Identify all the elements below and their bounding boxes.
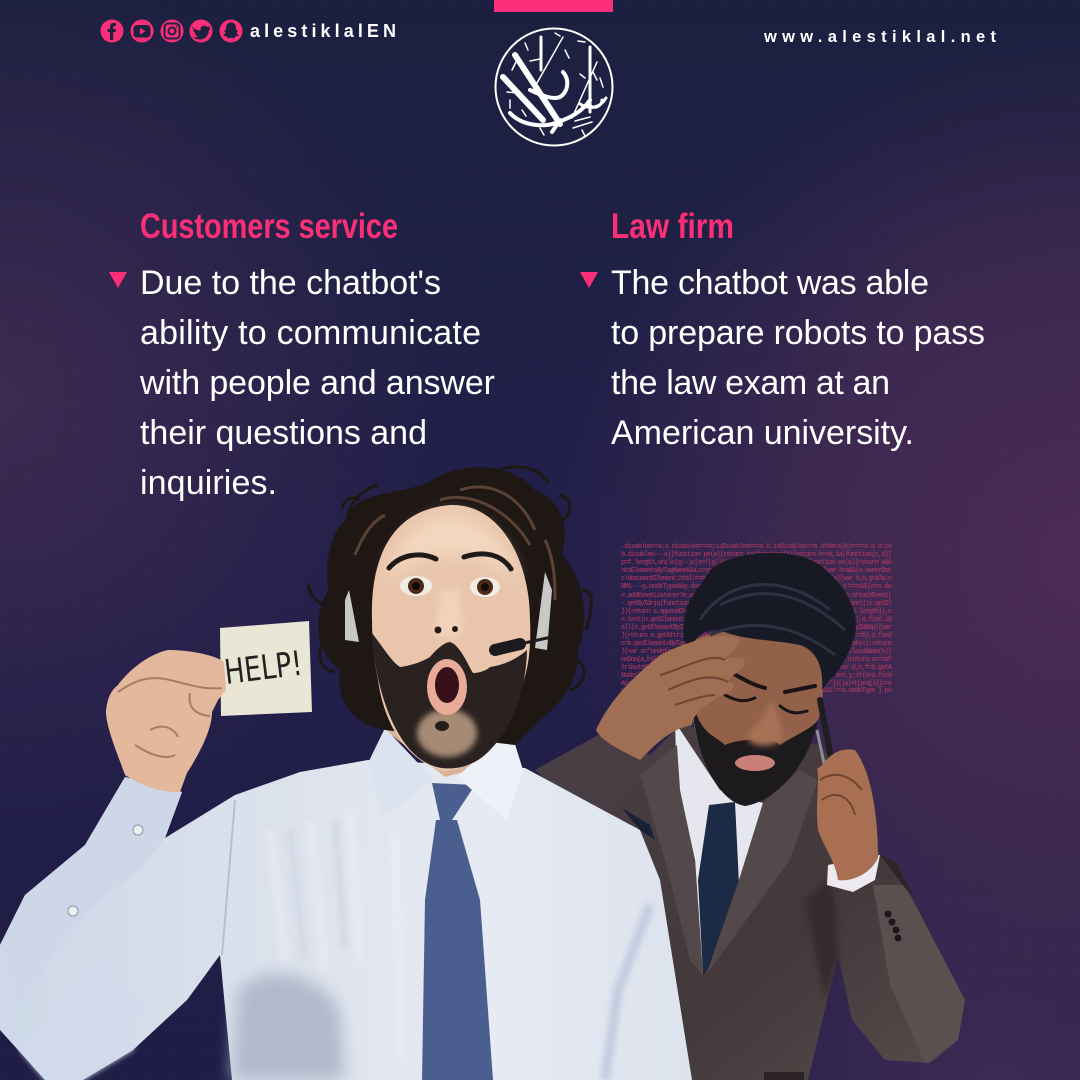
code texture: all(n.getElementById)?function(a,b){if("undefined"!=typeof b.getElementById&&p){var <box>621 624 892 632</box>
logo: calligraphic seal <box>496 28 612 146</box>
hand on phone <box>817 749 878 880</box>
code texture: e.test(n.getElementsByClassName),c.getById=ja(function(a){return a.id=u}),d.find.id <box>621 616 892 624</box>
code texture: .disabled==a:b.disabled===b;isDisabled===a b.isDisabled!=a d=Vars[b]====a.b d:cd <box>621 543 892 551</box>
code texture <box>621 543 893 695</box>
code texture: e.addEventListener?e.addEventListener("unload",da,!1):e.attachEvent&&e.attachEvent( <box>621 592 892 600</box>
cheek shading <box>388 515 515 580</box>
code texture: yClass d.find(a,b)===c.call(a)?e:b[a]},d.qsa(o.querySelector)&&1!==a.nodeType } pu <box>621 687 892 695</box>
text block: customers service: with people and answer <box>139 364 495 402</box>
hand holding note <box>106 650 226 792</box>
code texture: p=f.length,while(g--)c[e=f[g]]&&(c[e]=!(d[e]=c[e]))})})}function oe(a){return a&& <box>621 559 893 567</box>
top accent bar <box>494 0 613 12</box>
code texture: }{return e.getAttributeNode&&a.getAttributeNode("id");return c&&c.value===b},d.find <box>621 632 892 640</box>
text block: customers service: Due to the chatbot's <box>140 264 441 302</box>
icon: facebook <box>100 20 124 42</box>
code texture: }{var c="undefined"!=typeof a.getElementsByClassName&&a.getElementsByClassName(b)} <box>621 648 892 656</box>
finger lines <box>660 658 728 705</box>
hair <box>318 467 584 745</box>
text block: law firm: The chatbot was able <box>611 264 929 302</box>
headset microphone <box>495 636 556 650</box>
shirt <box>0 760 692 1080</box>
tie <box>698 802 741 975</box>
sticky note <box>220 621 312 716</box>
sleeve cuff <box>827 855 880 892</box>
shirt front <box>675 722 763 975</box>
icon: snapchat <box>220 20 242 42</box>
cuff buttons <box>68 825 143 916</box>
social handle: alestiklalEN <box>250 21 396 41</box>
code texture: }){return a.appendChild(o.createComment("")),!a.getElementsByTagName("*").length}),c <box>621 608 892 616</box>
left pocket square <box>622 808 655 840</box>
icon: instagram <box>160 20 184 42</box>
heading: law firm: Law firm <box>611 207 734 246</box>
jacket <box>535 725 965 1080</box>
code texture: ntsElementsByTagName&&a;c=ge.support={},f=ge.isXML=function(a){var b=a&&(a.ownerDoc <box>621 567 892 575</box>
code texture: msDom(a,b){if("undefined"!=typeof b.getAttribute&&b.getAttribute("id"))return e===u? <box>621 656 892 664</box>
neck and face <box>690 630 823 804</box>
neck <box>385 730 510 777</box>
headset <box>345 572 552 650</box>
heading: customers service: Customers service <box>140 207 398 246</box>
beard <box>372 633 527 768</box>
code texture: tributeNode("id"),c&&c.value===a};d.attrHandle.id=function(a,b,c){var d,e,f=b.getA <box>621 664 893 672</box>
sticky note: HELP! <box>222 644 305 693</box>
text block: law firm: to prepare robots to pass <box>611 314 985 352</box>
brows and eyes <box>725 672 815 713</box>
text block: law firm: American university. <box>611 414 914 452</box>
collar <box>368 728 523 820</box>
code texture: NM1---g.nodeType&&g.documentElement;n=o.documentElement,p=!f(o),v!==o&&(e=o.de <box>621 583 892 591</box>
panel: customers service <box>109 207 495 502</box>
chin patch <box>417 709 477 757</box>
hair <box>683 553 856 690</box>
nose <box>435 590 463 638</box>
hand on forehead <box>596 636 745 760</box>
code texture: c!documentElement;html!==b.nodeName:!1},m=ge.setDocument=function(a){var b,e,g=a?a:v <box>621 575 893 583</box>
tie <box>422 783 493 1080</box>
beard <box>692 700 818 806</box>
code texture: Node("id"),d&&d.specified};detached"|!==typeof a.getAttribute;var b=c,y;if(d=a.find <box>621 672 892 680</box>
text block: customers service <box>139 264 495 502</box>
mouth <box>427 659 467 731</box>
code texture: -.getById=ja(function(a){return n.appendChild(a).id=u,!o.getElementsByName||!o.getEl <box>621 600 892 608</box>
icon: bullet triangle <box>109 272 127 288</box>
code texture: c=b.getElementsByTagName(a),"*"===a){while(c=f[e++])1===c.nodeType&&d.push(c);return <box>621 640 892 648</box>
figure: stressed lawyer on phone <box>535 553 965 1080</box>
text block: customers service: inquiries. <box>140 464 277 502</box>
panel: law firm <box>580 207 985 452</box>
eyes <box>400 576 500 597</box>
icon: youtube <box>130 20 154 42</box>
figure: surprised support agent <box>0 467 692 1080</box>
text block: law firm <box>611 264 985 452</box>
text block: law firm: the law exam at an <box>611 364 890 402</box>
code texture: b.disabled---a}}function pe(a){return ia(function(b){return b=+b,ia(function(c,d){ <box>621 551 892 559</box>
lips <box>735 755 775 771</box>
code texture: A(a.b)|=a;(function(a){n.appendChild(a).innerHTML="<a id="+u+"></a>"})(ja)+t[a=q[i]]==a <box>621 680 893 688</box>
text block: customers service: their questions and <box>140 414 427 452</box>
website url: www.alestiklal.net <box>763 28 996 46</box>
phone <box>820 700 833 768</box>
text block: customers service: ability to communicate <box>140 314 481 352</box>
social icons <box>100 20 242 42</box>
icon: twitter <box>190 20 212 42</box>
icon: bullet triangle <box>580 272 598 288</box>
lapels <box>640 745 818 975</box>
nose <box>748 700 783 746</box>
face <box>372 505 530 771</box>
eyebrows <box>389 554 511 569</box>
